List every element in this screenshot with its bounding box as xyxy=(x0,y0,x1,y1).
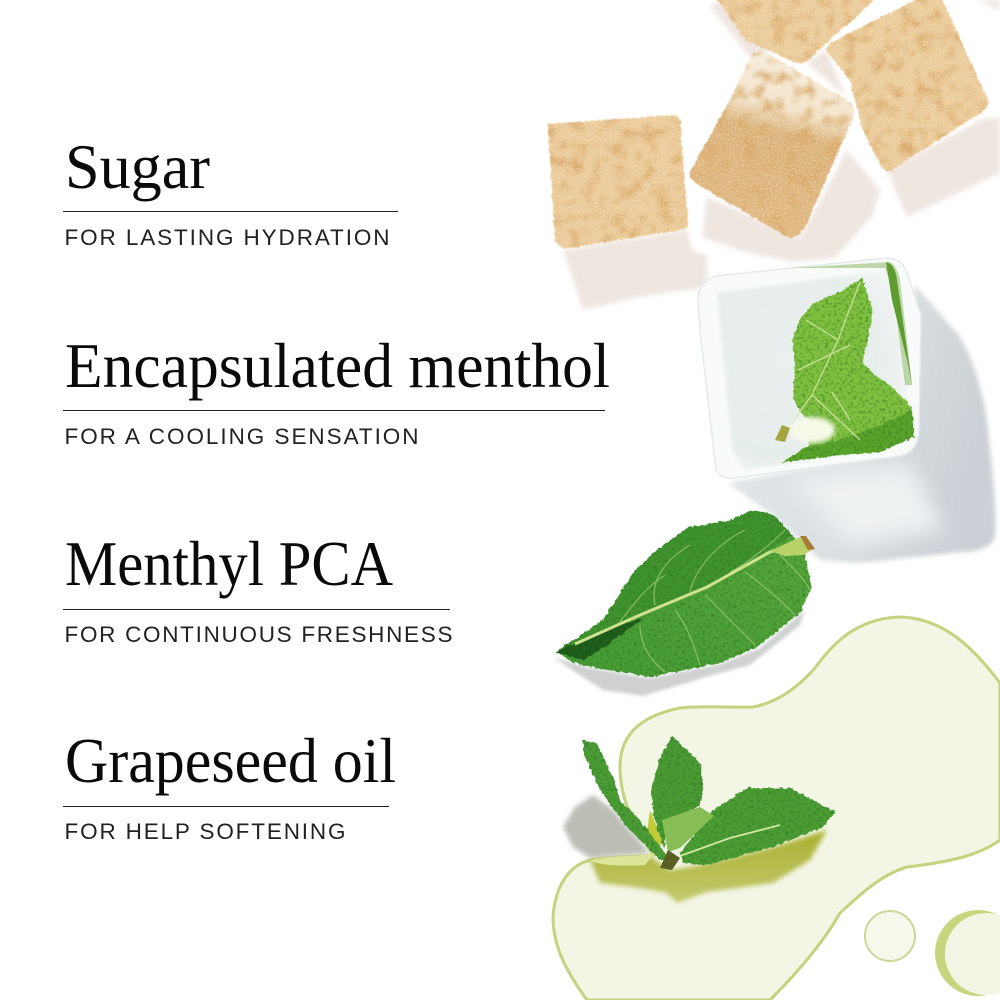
heading: Sugar: Sugar xyxy=(65,131,210,202)
oil puddle xyxy=(553,617,1000,1000)
icon: sugar cube top xyxy=(713,0,876,63)
sprig shadow on white xyxy=(563,795,650,858)
icon: sugar cube right xyxy=(826,0,988,170)
icon: sugar cube middle xyxy=(690,52,854,237)
caption: for help softening: FOR HELP SOFTENING xyxy=(64,819,346,844)
sprig shadow in oil xyxy=(590,810,827,903)
shadows of sugar cubes xyxy=(563,0,1000,310)
heading: Grapeseed oil: Grapeseed oil xyxy=(65,725,396,796)
ice cube shadow xyxy=(728,285,995,563)
icon: mint leaf xyxy=(556,510,815,677)
heading: Encapsulated menthol: Encapsulated menthol xyxy=(65,330,610,401)
caption: for lasting hydration: FOR LASTING HYDRATION xyxy=(64,225,390,250)
icon: sugar cube left xyxy=(548,115,688,249)
caption: for continuous freshness: FOR CONTINUOUS FRESHNESS xyxy=(64,622,452,647)
leaf shadow xyxy=(553,610,805,696)
oil droplet small xyxy=(865,911,915,961)
caption: for a cooling sensation: FOR A COOLING SENSATION xyxy=(64,424,418,449)
icon: ice cube with mint leaf xyxy=(698,258,921,478)
oil droplet large xyxy=(935,910,1000,996)
icon: mint sprig xyxy=(583,736,836,870)
heading: Menthyl PCA: Menthyl PCA xyxy=(65,528,393,599)
